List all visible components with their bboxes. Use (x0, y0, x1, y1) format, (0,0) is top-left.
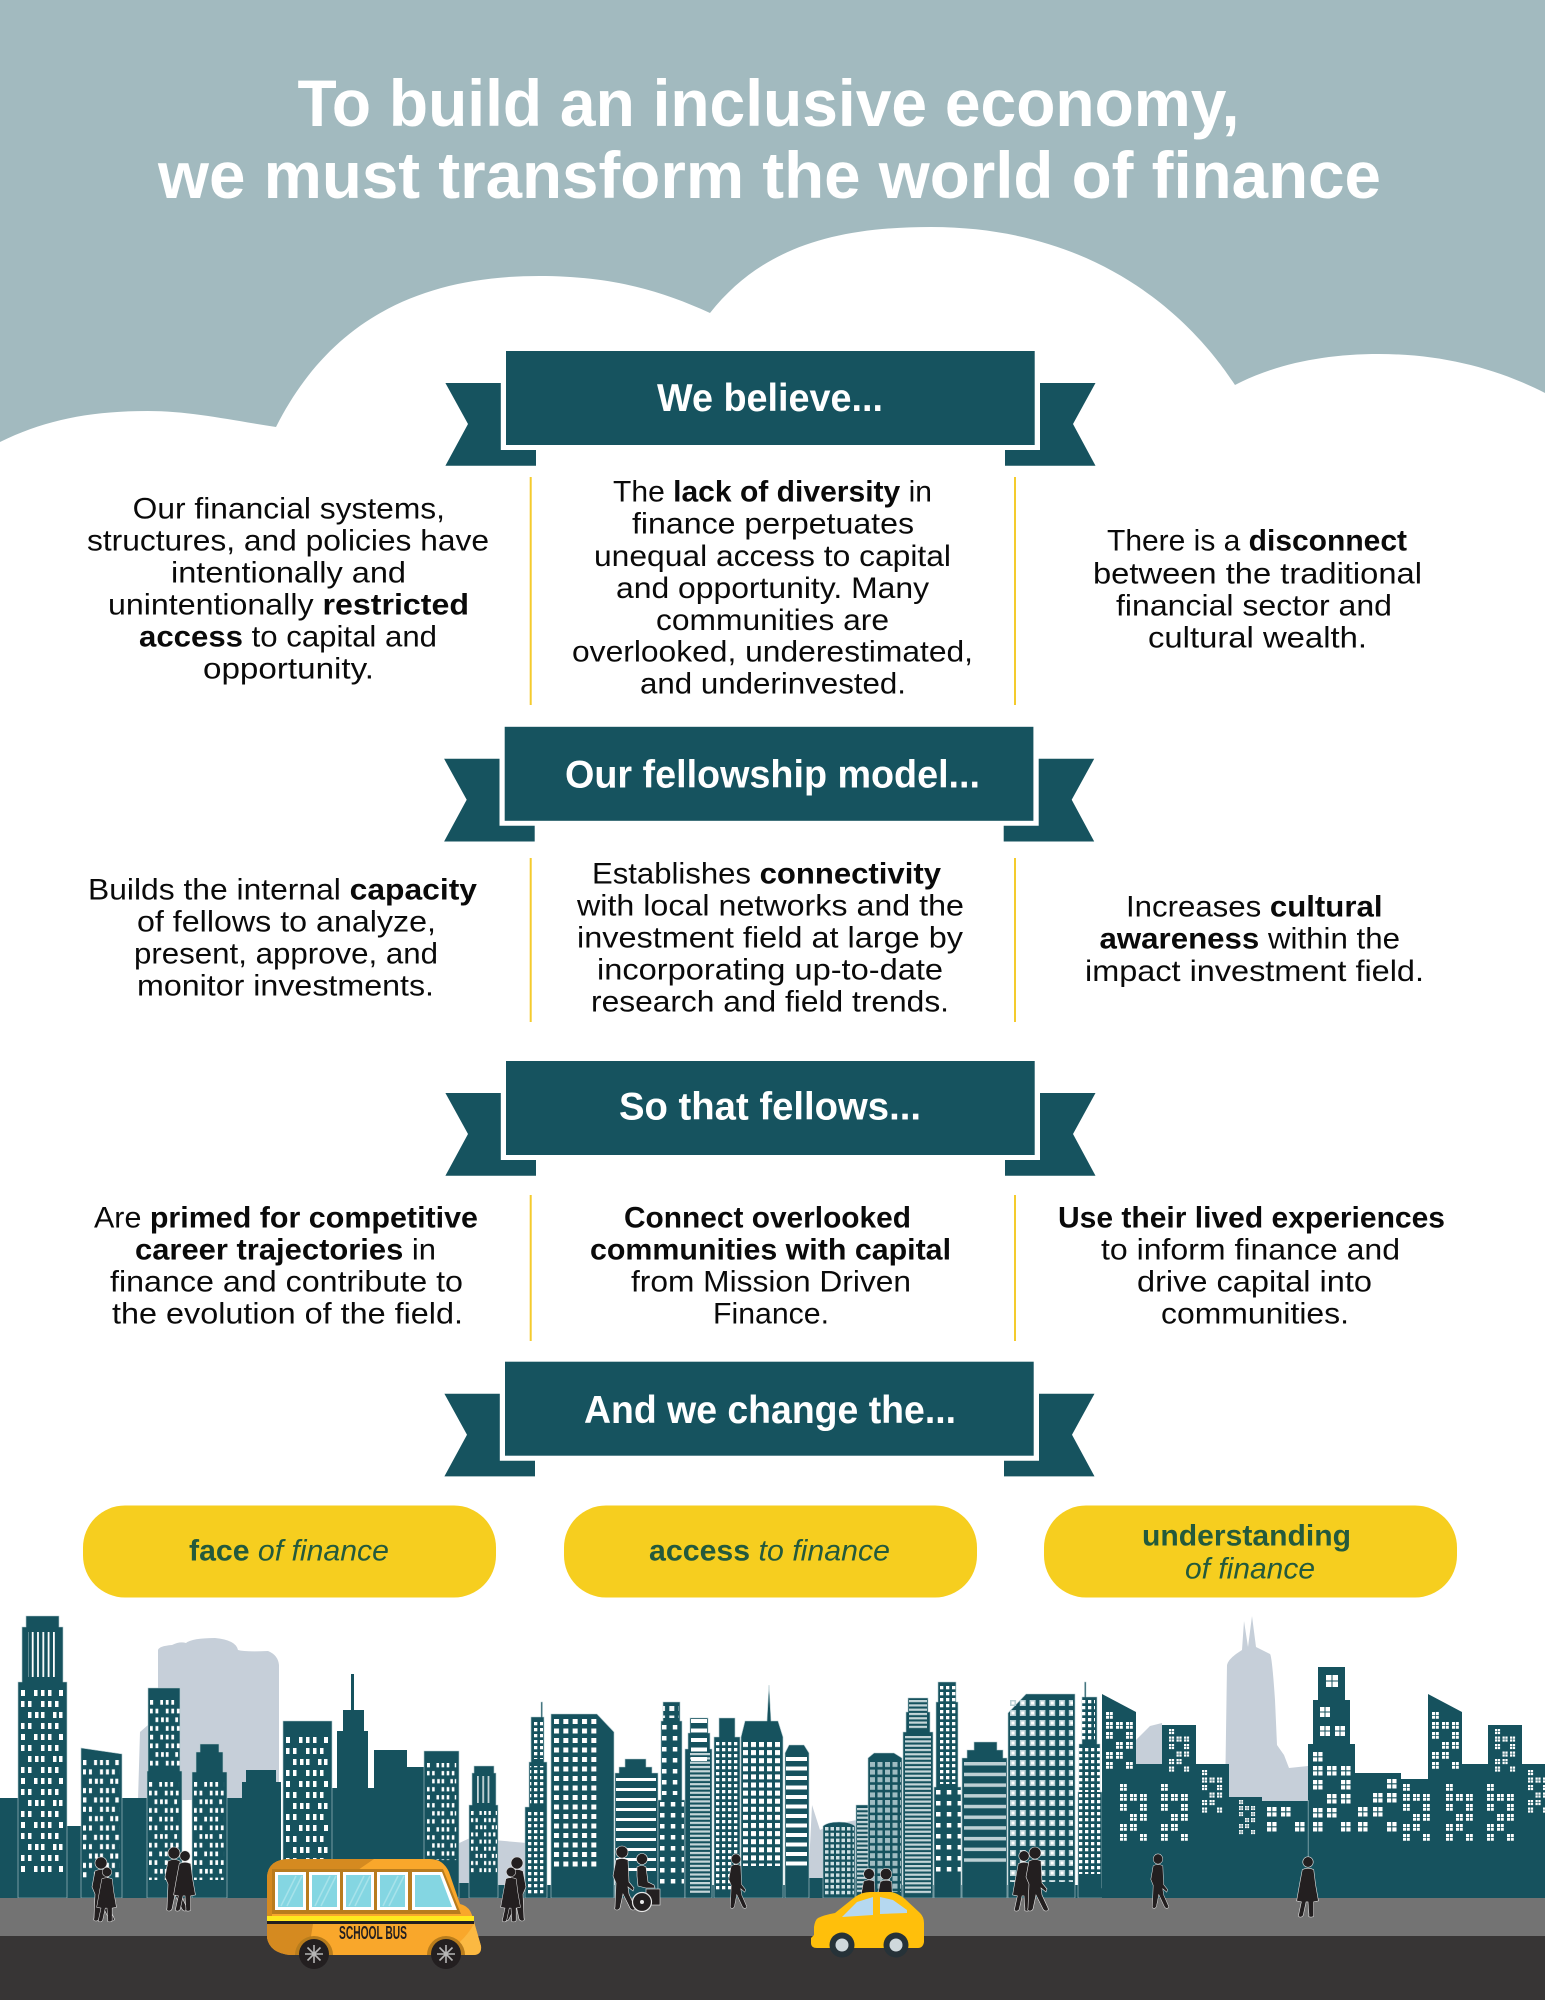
header background with cloud edge (0, 0, 1545, 442)
window grids: centre towers (527, 1686, 1101, 1896)
text block: capacity: of fellows to analyze, (137, 905, 436, 938)
text block: connect communities (590, 1202, 951, 1330)
text block: lived experiences: to inform finance and (1101, 1234, 1400, 1266)
text block: connect communities: Finance. (713, 1298, 829, 1330)
school bus: SCHOOL BUS (339, 1923, 407, 1943)
text block: lack of diversity: unequal access to capital (594, 540, 951, 573)
panel: we believe columns (87, 475, 1422, 705)
text block: lived experiences: Use their lived experiences (1058, 1202, 1445, 1234)
text block: financial systems: structures, and policies have (87, 524, 489, 557)
text block: capacity: Builds the internal capacity (88, 873, 477, 906)
left towers (18, 1616, 498, 1898)
text block: lack of diversity: overlooked, underestimated, (572, 635, 973, 668)
text block: capacity: monitor investments. (137, 969, 434, 1002)
text block: connect communities: from Mission Driven (631, 1266, 911, 1298)
text block: capacity (88, 873, 477, 1002)
text block: financial systems (87, 492, 489, 685)
text block: disconnect: between the traditional (1093, 557, 1422, 590)
text block: connectivity: investment field at large by (577, 921, 963, 954)
text block: financial systems: unintentionally restricted (108, 588, 469, 621)
text block: cultural awareness (1085, 890, 1424, 988)
text block: cultural awareness: awareness within the (1100, 922, 1400, 955)
banner: And we change the: And we change the... (584, 1389, 956, 1432)
text block: connectivity: with local networks and the (576, 889, 964, 922)
text block: career trajectories: career trajectories in (135, 1234, 436, 1266)
pill: face of finance: face of finance (189, 1535, 389, 1568)
wheelchair user (632, 1854, 660, 1912)
banner: We believe (445, 351, 1095, 466)
text block: lived experiences: communities. (1161, 1298, 1349, 1330)
text block: capacity: present, approve, and (134, 937, 438, 970)
text block: cultural awareness: impact investment field. (1085, 955, 1424, 988)
banner: So that fellows (445, 1061, 1095, 1176)
text block: financial systems: intentionally and (171, 556, 406, 589)
banner: So that fellows: So that fellows... (619, 1086, 921, 1128)
banner: We believe: We believe... (657, 377, 883, 420)
text block: lack of diversity: The lack of diversity in (613, 475, 932, 508)
school bus (267, 1859, 481, 1969)
text block: connectivity: research and field trends. (591, 985, 949, 1018)
text block: connect communities: Connect overlooked (624, 1202, 911, 1234)
text block: cultural awareness: Increases cultural (1126, 890, 1382, 923)
text block: lack of diversity: communities are (656, 604, 889, 637)
city skyline (0, 1616, 1545, 1900)
centre towers (525, 1682, 1112, 1898)
text block: disconnect (1093, 524, 1422, 654)
sidewalk (0, 1898, 1545, 1936)
pedestrians (92, 1846, 1318, 1929)
title: we must transform the world of finance (157, 138, 1381, 212)
text block: disconnect: financial sector and (1116, 589, 1392, 622)
text block: connectivity (576, 857, 964, 1018)
banner: Our fellowship model (444, 727, 1094, 842)
text block: financial systems: Our financial systems, (133, 492, 445, 525)
pill: understanding of finance: of finance (1185, 1553, 1315, 1586)
text block: career trajectories (94, 1202, 478, 1330)
right towers (1102, 1667, 1355, 1898)
road (0, 1936, 1545, 2000)
banner: And we change the (444, 1362, 1094, 1476)
taxi (811, 1892, 924, 1958)
window grids: right towers (1106, 1675, 1545, 1858)
panel: so that fellows columns (94, 1195, 1445, 1341)
text block: lack of diversity: and underinvested. (640, 667, 906, 700)
text block: connect communities: communities with capital (590, 1234, 951, 1266)
pill: understanding of finance: understanding (1142, 1520, 1351, 1553)
text block: disconnect: There is a disconnect (1107, 524, 1407, 557)
text block: lack of diversity: finance perpetuates (632, 507, 914, 540)
pill: understanding of finance (1044, 1506, 1457, 1598)
text block: lack of diversity (572, 475, 973, 700)
text block: financial systems: access to capital and (139, 620, 437, 653)
text block: career trajectories: finance and contribute to (110, 1266, 463, 1298)
text block: disconnect: cultural wealth. (1148, 621, 1367, 654)
text block: lack of diversity: and opportunity. Many (616, 572, 929, 605)
pill: face of finance (83, 1506, 496, 1598)
pill: access to finance: access to finance (649, 1535, 890, 1568)
text block: lived experiences (1058, 1202, 1445, 1330)
banner: Our fellowship model: Our fellowship model... (565, 754, 980, 796)
text block: lived experiences: drive capital into (1137, 1266, 1372, 1298)
window grids: left towers (21, 1632, 497, 1897)
panel: fellowship model columns (88, 857, 1424, 1022)
text block: career trajectories: Are primed for competitive (94, 1202, 478, 1234)
distant grey towers (138, 1616, 1308, 1900)
text block: career trajectories: the evolution of the field. (112, 1298, 463, 1330)
skyline silhouettes (0, 1674, 1545, 1899)
text block: financial systems: opportunity. (203, 652, 374, 685)
text block: connectivity: incorporating up-to-date (597, 953, 943, 986)
text block: connectivity: Establishes connectivity (592, 857, 941, 890)
title (157, 66, 1381, 212)
pill: access to finance (564, 1506, 977, 1598)
title: To build an inclusive economy, (298, 66, 1240, 140)
